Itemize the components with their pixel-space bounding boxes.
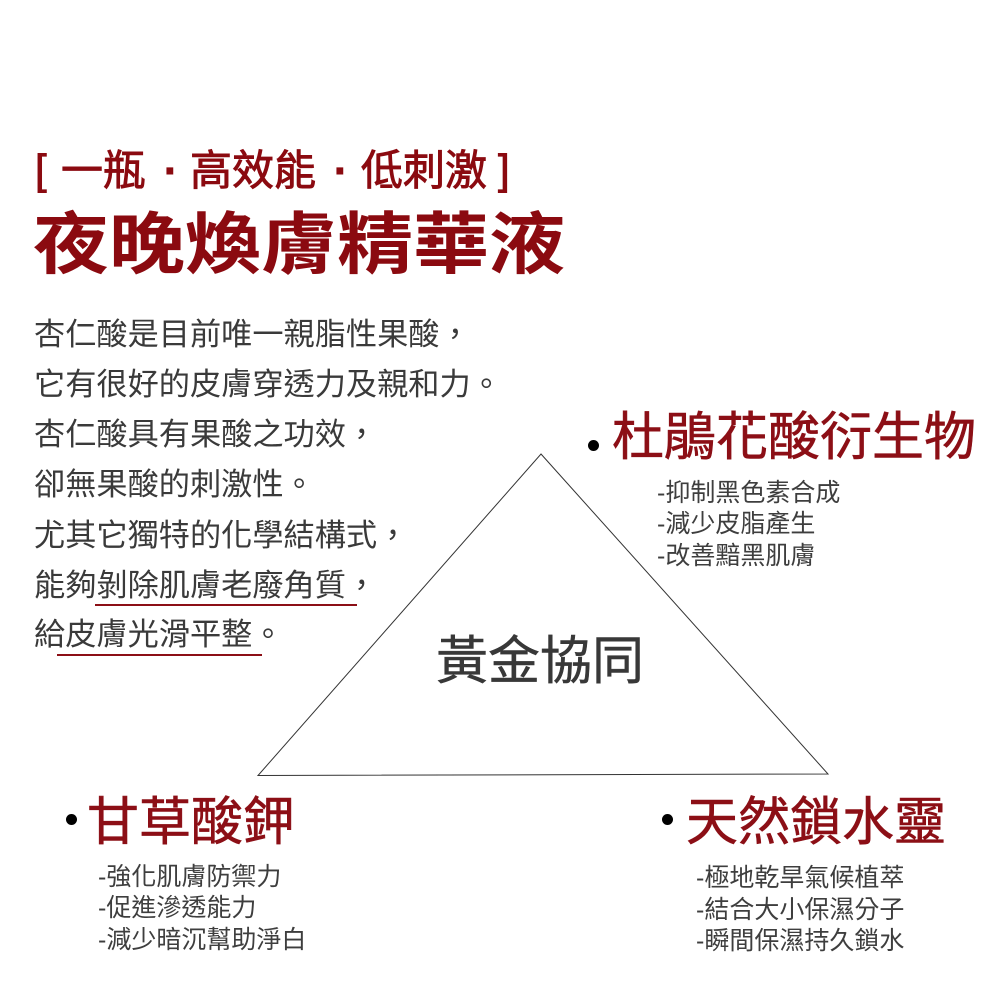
text block: description: 給皮膚光滑平整。	[34, 617, 284, 652]
text block: description	[34, 317, 502, 652]
benefits list: -改善黯黑肌膚	[657, 542, 815, 570]
bullet	[662, 814, 673, 825]
subtitle: ·	[164, 147, 178, 194]
panel: bottom right ingredient	[662, 794, 946, 955]
bullet	[588, 440, 599, 451]
text block: description: 杏仁酸具有果酸之功效，	[34, 417, 377, 452]
subtitle: 低刺激	[361, 147, 487, 194]
benefits list: -減少暗沉幫助淨白	[98, 926, 306, 954]
subtitle: 高效能	[190, 147, 316, 194]
subtitle: [	[35, 146, 47, 193]
benefits list	[696, 864, 904, 955]
title: 夜晚煥膚精華液	[33, 208, 565, 283]
text block: description: 它有很好的皮膚穿透力及親和力。	[34, 367, 502, 402]
underline: 皮膚光滑平整	[57, 654, 262, 656]
triangle label: 黃金協同	[436, 633, 644, 691]
heading: 杜鵑花酸衍生物	[612, 409, 976, 467]
benefits list: -強化肌膚防禦力	[98, 863, 281, 891]
subtitle	[35, 146, 510, 194]
heading: 天然鎖水靈	[686, 794, 946, 852]
text block: description: 杏仁酸是目前唯一親脂性果酸，	[34, 317, 471, 352]
panel: top right ingredient	[588, 409, 976, 570]
heading: 甘草酸鉀	[87, 794, 295, 852]
text block: description: 能夠剝除肌膚老廢角質，	[34, 568, 377, 603]
benefits list: -抑制黑色素合成	[657, 479, 840, 507]
benefits list	[657, 479, 840, 570]
benefits list: -極地乾旱氣候植萃	[696, 864, 904, 892]
bullet	[66, 814, 77, 825]
benefits list: -結合大小保濕分子	[696, 896, 904, 924]
subtitle: ·	[334, 147, 348, 194]
panel: bottom left ingredient	[66, 794, 306, 954]
benefits list	[98, 863, 306, 954]
text block: description: 尤其它獨特的化學結構式，	[34, 518, 408, 553]
benefits list: -減少皮脂產生	[657, 510, 815, 538]
subtitle: ]	[498, 146, 510, 193]
text block: description: 卻無果酸的刺激性。	[34, 467, 315, 502]
benefits list: -瞬間保濕持久鎖水	[696, 927, 904, 955]
subtitle: 一瓶	[61, 147, 145, 194]
underline: 剝除肌膚老廢角質	[95, 604, 357, 606]
benefits list: -促進滲透能力	[98, 894, 256, 922]
